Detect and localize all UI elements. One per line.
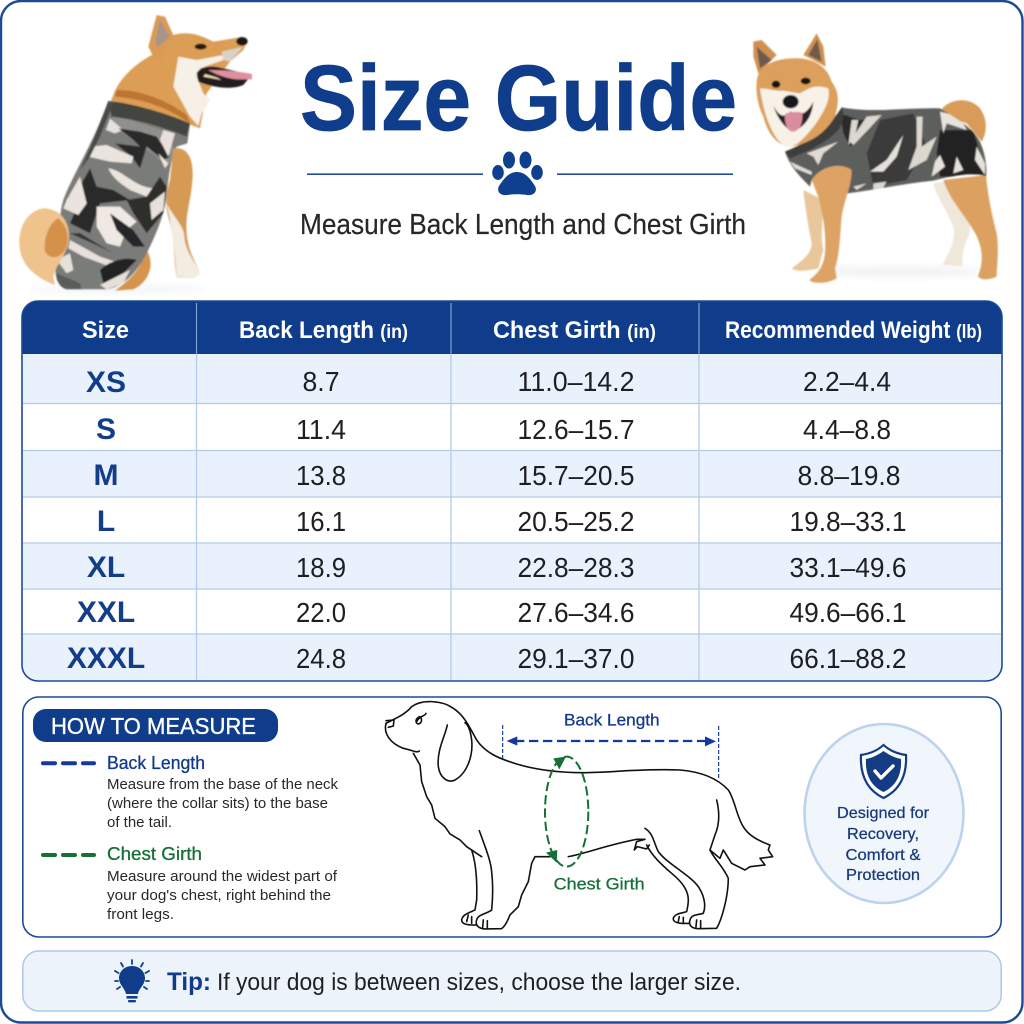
row: XL: 22.8–28.3 bbox=[518, 552, 634, 583]
row: M bbox=[94, 459, 900, 492]
row: XXXL: 29.1–37.0 bbox=[518, 643, 634, 674]
row: XS: 2.2–4.4 bbox=[803, 366, 891, 397]
legend: chest girth: front legs. bbox=[107, 906, 174, 923]
panel: how to measure bbox=[23, 697, 1001, 937]
paw divider bbox=[307, 152, 733, 195]
row: XS: 11.0–14.2 bbox=[518, 366, 634, 397]
row: L: L bbox=[97, 505, 115, 538]
row: S: S bbox=[96, 413, 116, 446]
badge text: Designed for bbox=[837, 805, 930, 822]
near rear leg and flank bbox=[645, 800, 728, 929]
far front leg bbox=[792, 190, 823, 271]
row: XXXL bbox=[67, 642, 906, 675]
legend: back length: of the tail. bbox=[107, 814, 172, 831]
belly bbox=[568, 839, 649, 857]
tail bbox=[19, 208, 69, 285]
dog outline bbox=[385, 702, 773, 929]
front leg bbox=[166, 148, 199, 278]
badge text: Protection bbox=[846, 867, 920, 884]
badge: how to measure: HOW TO MEASURE bbox=[51, 713, 256, 739]
column heading: chest girth: Chest Girth (in) bbox=[493, 317, 656, 344]
column heading: recommended weight: Recommended Weight (lb) bbox=[725, 317, 982, 344]
row: S: 4.4–8.8 bbox=[803, 414, 891, 445]
tip text: Tip: bbox=[167, 968, 211, 996]
mouth bbox=[197, 67, 252, 88]
icon: light bulb bbox=[115, 960, 149, 1002]
badge: designed for recovery bbox=[804, 724, 964, 903]
near front leg bbox=[476, 831, 550, 929]
row: XXXL: 66.1–88.2 bbox=[790, 643, 906, 674]
row: S: 12.6–15.7 bbox=[518, 414, 634, 445]
near rear leg bbox=[943, 175, 998, 279]
row: L bbox=[97, 505, 906, 538]
row: XS: XS bbox=[86, 366, 126, 399]
row: M: 15.7–20.5 bbox=[518, 460, 634, 491]
far rear leg bbox=[933, 180, 970, 266]
badge text: Comfort & bbox=[846, 847, 921, 864]
row: XXL: 27.6–34.6 bbox=[518, 597, 634, 628]
row: XXL: 22.0 bbox=[296, 597, 346, 628]
row: S bbox=[96, 413, 891, 446]
near front leg bbox=[809, 166, 852, 283]
row: XXXL: XXXL bbox=[67, 642, 145, 675]
legend: back length: Back Length bbox=[107, 753, 205, 773]
vest bbox=[55, 101, 190, 289]
row: S: 11.4 bbox=[296, 414, 346, 445]
row: XL bbox=[87, 551, 906, 584]
legend: back length bbox=[43, 753, 338, 831]
white muzzle and cheeks bbox=[760, 87, 829, 147]
arrow: chest girth bbox=[545, 757, 588, 867]
row: XS: 8.7 bbox=[302, 366, 340, 397]
row: XXL bbox=[77, 596, 906, 629]
size table bbox=[22, 301, 1002, 681]
column heading: back length: Back Length (in) bbox=[239, 317, 408, 344]
legend: chest girth: your dog's chest, right behind the bbox=[107, 887, 331, 904]
legend: back length: Measure from the base of the neck bbox=[107, 776, 338, 793]
badge text bbox=[837, 805, 930, 884]
row: XL: 18.9 bbox=[296, 552, 346, 583]
ear bbox=[148, 15, 173, 60]
row: XXL: 49.6–66.1 bbox=[790, 597, 906, 628]
row: M: 13.8 bbox=[296, 460, 346, 491]
body fur bbox=[110, 33, 247, 128]
row: L: 20.5–25.2 bbox=[518, 506, 634, 537]
legend: back length: (where the collar sits) to the base bbox=[107, 795, 328, 812]
legend: chest girth: Measure around the widest part of bbox=[107, 868, 338, 885]
subtitle: Measure Back Length and Chest Girth bbox=[300, 209, 746, 241]
far haunch bbox=[115, 250, 151, 291]
icon: paw bbox=[492, 152, 543, 195]
head bbox=[756, 58, 838, 146]
row: XL: XL bbox=[87, 551, 125, 584]
far rear leg bbox=[647, 845, 689, 923]
row: L: 16.1 bbox=[296, 506, 346, 537]
title: Size Guide bbox=[300, 46, 737, 150]
ears bbox=[753, 40, 777, 73]
legend: chest girth bbox=[43, 844, 338, 923]
tip text: If your dog is between sizes, choose the larger size. bbox=[217, 969, 741, 996]
table body rows bbox=[22, 301, 1002, 681]
diagram: dog outline with measurements bbox=[385, 702, 773, 929]
legend: chest girth: Chest Girth bbox=[107, 844, 202, 864]
row: M: M bbox=[94, 459, 118, 492]
label: chest girth: Chest Girth bbox=[554, 874, 645, 893]
panel: tip bbox=[23, 951, 1001, 1011]
cheek and throat bbox=[173, 55, 223, 126]
photo: standing dog in camo recovery suit bbox=[753, 33, 998, 283]
row: M: 8.8–19.8 bbox=[798, 460, 900, 491]
collar bbox=[108, 101, 190, 137]
photo: sitting dog in camo recovery suit bbox=[19, 15, 252, 292]
row: XL: 33.1–49.6 bbox=[790, 552, 906, 583]
row: XS bbox=[86, 366, 891, 399]
row: XXXL: 24.8 bbox=[296, 643, 346, 674]
vest bbox=[785, 107, 986, 193]
badge text: Recovery, bbox=[847, 826, 919, 843]
table header bbox=[22, 301, 1002, 354]
column heading: size: Size bbox=[82, 317, 129, 344]
row: L: 19.8–33.1 bbox=[790, 506, 906, 537]
icon: shield with check bbox=[861, 745, 906, 798]
tail bbox=[942, 100, 986, 142]
collar bbox=[785, 107, 843, 158]
row: XXL: XXL bbox=[77, 596, 135, 629]
arrow: back length bbox=[503, 725, 719, 780]
label: back length: Back Length bbox=[564, 710, 660, 729]
far front leg bbox=[462, 850, 477, 925]
